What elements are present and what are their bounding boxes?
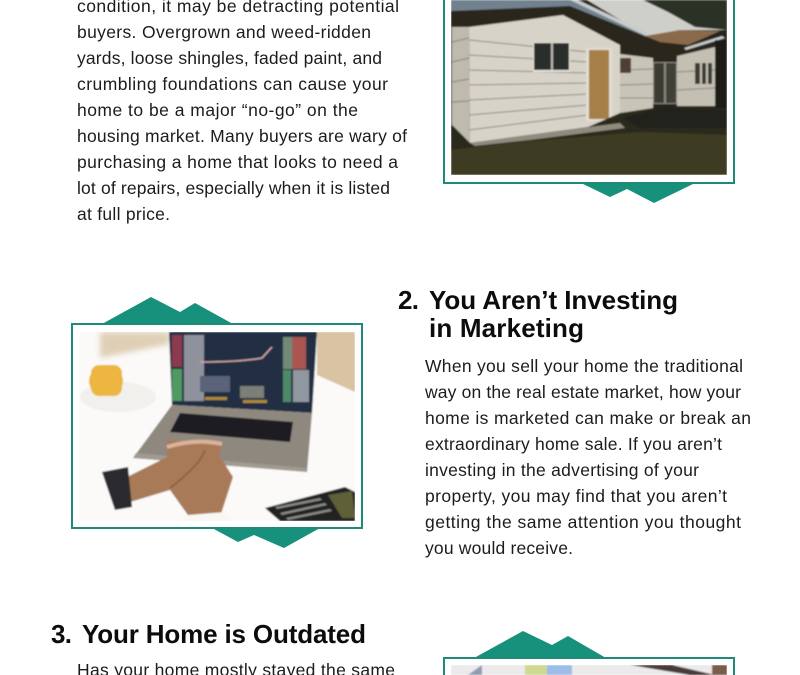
section 2 body text: home is marketed can make or break an [425, 408, 751, 428]
decorative peaks below laptop photo [212, 528, 320, 548]
section 1 body text [77, 0, 407, 224]
section 1 body text: home to be a major “no-go” on the [77, 100, 358, 120]
section 2 heading: in Marketing [429, 313, 584, 343]
charts photo [451, 665, 727, 675]
section 2 body text: investing in the advertising of your [425, 460, 699, 480]
section 3 heading: 3. [51, 619, 72, 649]
house photo [451, 0, 727, 175]
section 1 body text: yards, loose shingles, faded paint, and [77, 48, 382, 68]
photo frame: laptop and hands [72, 297, 362, 548]
section 1 body text: buyers. Overgrown and weed-ridden [77, 22, 371, 42]
decorative peaks below house photo [583, 184, 693, 203]
section 2 heading: You Aren’t Investing [429, 285, 678, 315]
decorative peaks above laptop photo [102, 297, 233, 324]
decorative peaks above charts photo [474, 631, 606, 658]
section 2 body text: way on the real estate market, how your [424, 382, 741, 402]
section 2 body text: When you sell your home the traditional [425, 356, 743, 376]
section 3 heading: Your Home is Outdated [82, 619, 366, 649]
section 2 body text: extraordinary home sale. If you aren’t [425, 434, 722, 454]
section 2 body text: property, you may find that you aren’t [425, 486, 727, 506]
section 2 heading [398, 285, 678, 343]
frame border [444, 658, 734, 675]
section 2 heading: 2. [398, 285, 419, 315]
section 1 body text: purchasing a home that looks to need a [77, 152, 398, 172]
photo frame: charts on desk [444, 631, 734, 675]
section 2 body text: you would receive. [425, 538, 573, 558]
section 2 body text [424, 356, 751, 558]
frame border [444, 0, 734, 183]
section 1 body text: crumbling foundations can cause your [77, 74, 388, 94]
section 1 body text: at full price. [77, 204, 170, 224]
section 1 body text: housing market. Many buyers are wary of [77, 126, 407, 146]
photo frame: run-down house [444, 0, 734, 203]
frame border [72, 324, 362, 528]
laptop photo [79, 332, 355, 521]
section 1 body text: lot of repairs, especially when it is listed [77, 178, 390, 198]
section 2 body text: getting the same attention you thought [425, 512, 741, 532]
